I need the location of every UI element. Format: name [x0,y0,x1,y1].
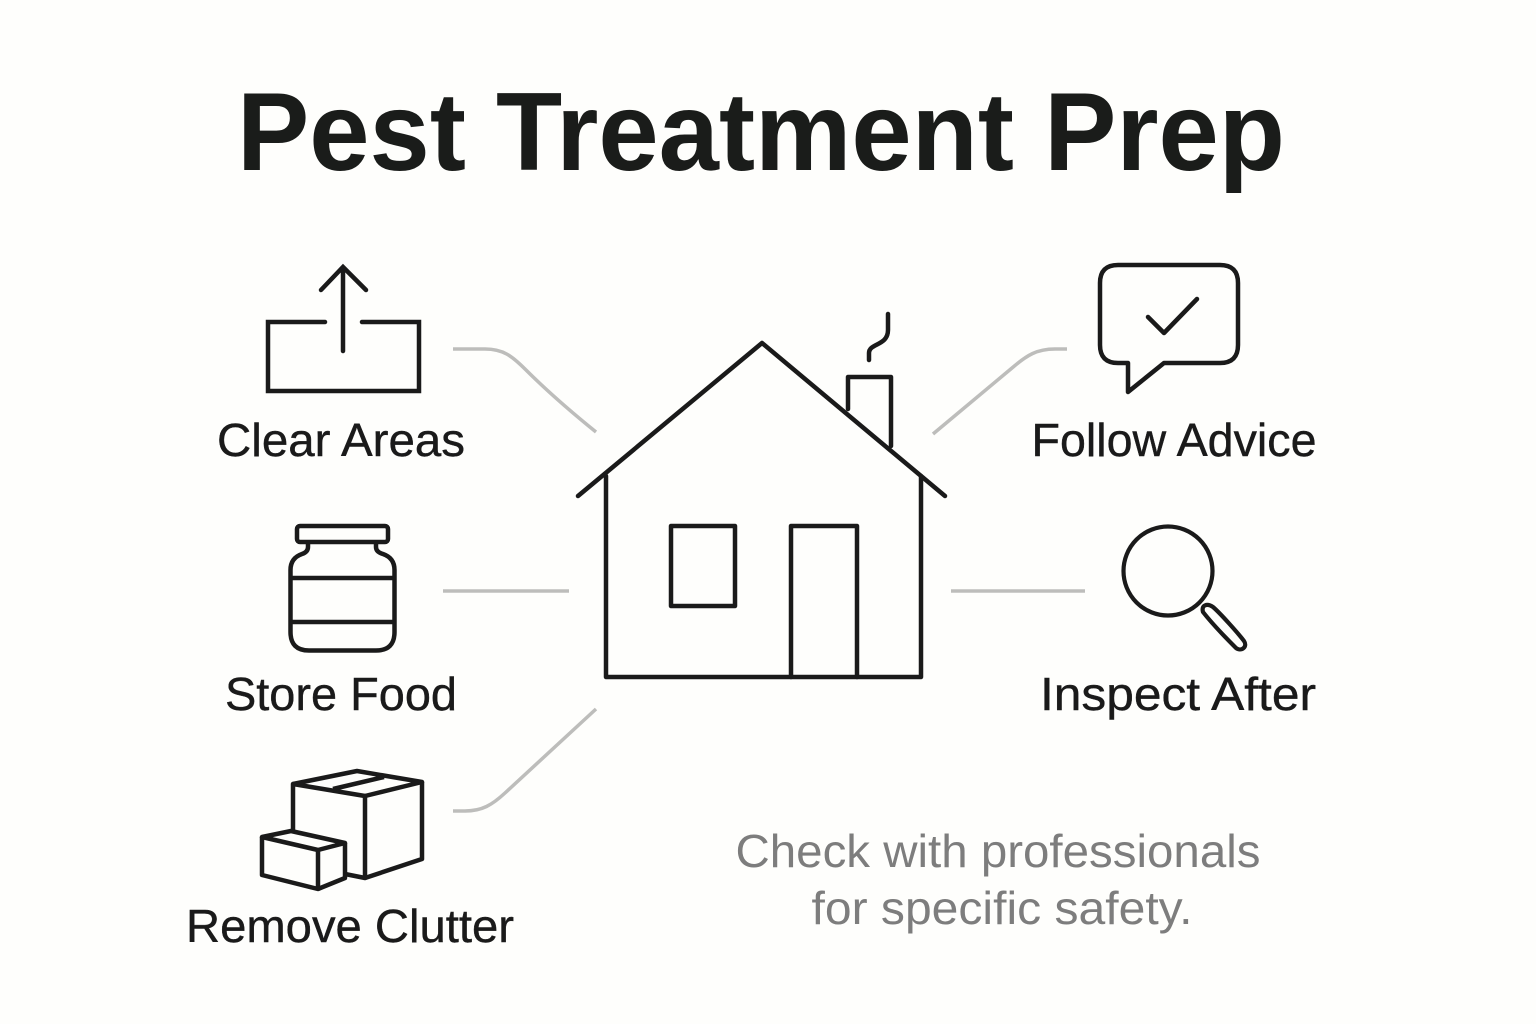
connector: remove clutter [453,709,596,811]
connector: inspect after [951,589,1085,593]
label: inspect after: Inspect After [1040,668,1316,720]
label: store food: Store Food [225,668,457,720]
note: safety advice [736,825,1260,934]
note: safety advice: for specific safety. [812,882,1192,934]
connector: store food [443,589,569,593]
icon: boxes [262,771,422,889]
connector: clear areas [453,349,596,432]
icon: house [578,314,945,677]
connector: follow advice [933,349,1067,434]
label: follow advice: Follow Advice [1032,414,1316,466]
note: safety advice: Check with professionals [736,825,1260,877]
icon: clear areas [268,267,419,391]
icon: jar [290,526,394,650]
label: clear areas: Clear Areas [217,414,465,466]
icon: speech bubble with check [1100,265,1238,392]
label: remove clutter: Remove Clutter [186,900,514,952]
title: Pest Treatment Prep [237,70,1285,194]
icon: magnifying glass [1124,526,1245,649]
